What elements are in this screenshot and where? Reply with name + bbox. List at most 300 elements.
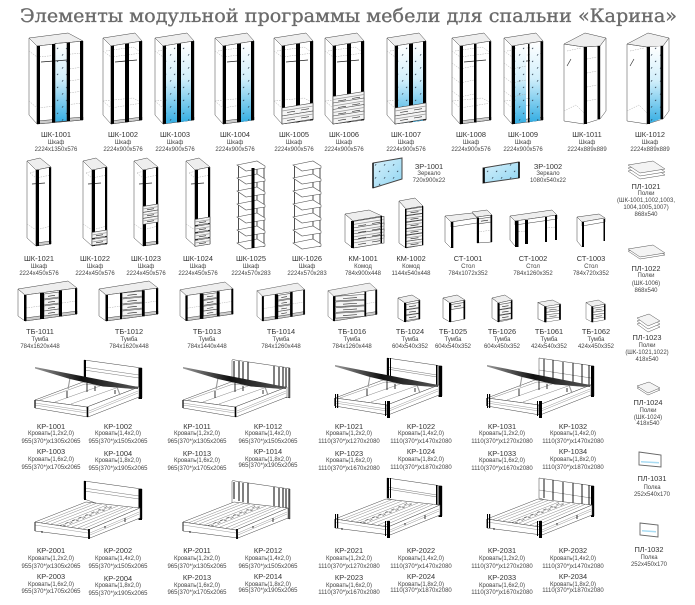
- caption: [155, 130, 195, 153]
- icon: desk with two pedestals: [510, 210, 557, 247]
- wardrobe ШК-1001: [29, 33, 83, 153]
- caption: Шкаф: [515, 140, 531, 146]
- nightstand ТБ-1025: [435, 295, 472, 350]
- caption: 784x1260x352: [513, 271, 553, 277]
- caption: 2224x889x889: [567, 147, 607, 153]
- captions: 1110(370*)x1270x2080: [318, 564, 380, 570]
- caption: ПЛ-1022: [631, 264, 661, 273]
- captions: Кровать(1,6x2,0): [28, 582, 74, 588]
- icon: lift bed, panel headboard: [487, 358, 594, 418]
- captions: 1110(370*)x1470x2080: [390, 564, 452, 570]
- captions: 1110(370*)x1870x2080: [390, 588, 452, 594]
- captions: КР-1011: [183, 422, 211, 431]
- caption: ПЛ-1031: [637, 474, 667, 483]
- caption: ТБ-1062: [582, 327, 610, 336]
- captions: Кровать(1,2x2,0): [479, 431, 525, 437]
- captions: КР-1004: [104, 449, 132, 458]
- captions: Кровать(1,2x2,0): [174, 431, 220, 437]
- captions: Кровать(1,8x2,0): [95, 583, 141, 589]
- icon: shelving: [293, 161, 321, 249]
- caption: [287, 254, 327, 277]
- captions: [471, 546, 604, 596]
- caption: [413, 162, 446, 184]
- captions: КР-1024: [407, 447, 435, 456]
- bed group КР-2031…2034: [471, 478, 604, 596]
- caption: КМ-1002: [396, 254, 426, 263]
- captions: [471, 422, 604, 472]
- caption: Стол: [584, 264, 598, 270]
- caption: [435, 327, 472, 350]
- icon: wardrobe with four drawers: [325, 33, 364, 124]
- icon: chest of drawers: [345, 210, 384, 248]
- captions: КР-2003: [37, 572, 65, 581]
- captions: КР-1014: [254, 447, 282, 456]
- sideboard ТБ-1014: [257, 283, 305, 350]
- captions: 955(370*)x1505x2065: [88, 439, 148, 445]
- captions: 1110(370*)x1270x2080: [318, 439, 380, 445]
- caption: 2224x450x576: [19, 271, 59, 277]
- caption: СТ-1002: [519, 254, 547, 263]
- wardrobe ШК-1012: [627, 33, 670, 153]
- captions: 1110(370*)x1470x2080: [542, 439, 604, 445]
- caption: ЗР-1002: [534, 162, 562, 171]
- captions: [167, 422, 298, 472]
- shelves ПЛ-1024: [633, 382, 663, 427]
- caption: Тумба: [273, 337, 290, 343]
- captions: [318, 546, 452, 596]
- bed group КР-2021…2024: [318, 478, 452, 596]
- captions: 955(370*)x1905x2065: [88, 591, 148, 597]
- icon: wardrobe with one mirror: [215, 33, 254, 124]
- icon: sideboard: [99, 281, 158, 321]
- captions: КР-2034: [559, 572, 587, 581]
- caption: 2224x900x576: [215, 147, 255, 153]
- captions: Кровать(1,8x2,0): [245, 582, 291, 588]
- caption: 418x540: [635, 357, 659, 363]
- caption: [19, 254, 59, 277]
- shelf ПЛ-1032: [631, 523, 668, 568]
- caption: 868x540: [634, 288, 658, 294]
- captions: Кровать(1,2x2,0): [479, 556, 525, 562]
- caption: ШК-1024: [183, 254, 213, 263]
- caption: Шкаф: [167, 140, 183, 146]
- captions: 1110(370*)x1870x2080: [542, 588, 604, 594]
- bed group КР-1031…1034: [471, 358, 604, 472]
- caption: [126, 254, 166, 277]
- captions: 1110(370*)x1870x2080: [542, 465, 604, 471]
- caption: ШК-1012: [635, 130, 665, 139]
- caption: Тумба: [199, 337, 216, 343]
- caption: 2224x570x283: [231, 271, 271, 277]
- captions: КР-2011: [183, 546, 211, 555]
- captions: КР-2032: [559, 546, 587, 555]
- desk СТ-1002: [510, 210, 557, 277]
- bed group КР-1001…1004: [21, 360, 148, 472]
- caption: 784x1260x448: [261, 344, 301, 350]
- caption: 2224x900x576: [451, 147, 491, 153]
- caption: (ШК-1001,1002,1003,: [617, 198, 675, 204]
- wardrobe ШК-1008: [451, 33, 491, 153]
- captions: КР-1032: [559, 422, 587, 431]
- wardrobe ШК-1026: [287, 161, 327, 277]
- caption: [531, 327, 568, 350]
- wardrobe ШК-1006: [324, 33, 364, 153]
- wardrobe ШК-1003: [155, 33, 195, 153]
- caption: (ШК-1021,1022): [625, 350, 669, 356]
- caption: [215, 130, 255, 153]
- icon: nightstand: [398, 295, 420, 322]
- captions: КР-1033: [488, 449, 516, 458]
- caption: ШК-1021: [24, 254, 54, 263]
- icon: slatted bed, plain headboard: [35, 481, 142, 539]
- mirror ЗР-1002: [483, 162, 567, 184]
- caption: ШК-1007: [391, 130, 421, 139]
- captions: 1110(370*)x1270x2080: [471, 439, 533, 445]
- sideboard ТБ-1011: [18, 281, 77, 350]
- caption: Тумба: [121, 337, 138, 343]
- captions: 965(370*)x1305x2065: [167, 564, 227, 570]
- icon: shelf stack: [637, 314, 660, 332]
- captions: 1110(370*)x1670x2080: [471, 466, 533, 472]
- caption: Шкаф: [190, 264, 206, 270]
- caption: [634, 474, 671, 498]
- caption: Комод: [354, 264, 372, 270]
- caption: 720x900x22: [413, 178, 446, 184]
- caption: ШК-1026: [292, 254, 322, 263]
- caption: Шкаф: [115, 140, 131, 146]
- shelf ПЛ-1031: [634, 452, 671, 498]
- icon: sideboard: [18, 281, 77, 321]
- caption: ПЛ-1021: [631, 182, 661, 191]
- icon: wardrobe with two drawers: [274, 33, 313, 124]
- captions: 1110(370*)x1670x2080: [471, 590, 533, 596]
- caption: Шкаф: [87, 264, 103, 270]
- icon: sideboard: [180, 282, 233, 321]
- caption: Шкаф: [243, 264, 259, 270]
- captions: Кровать(1,6x2,0): [479, 458, 525, 464]
- caption: Тумба: [541, 337, 558, 343]
- caption: [392, 327, 429, 350]
- caption: 784x1620x448: [20, 344, 60, 350]
- caption: 2224x900x576: [155, 147, 195, 153]
- captions: 955(370*)x1305x2065: [21, 564, 81, 570]
- caption: ПЛ-1032: [634, 545, 664, 554]
- caption: ЗР-1001: [415, 162, 443, 171]
- caption: [573, 254, 610, 277]
- caption: [274, 130, 314, 153]
- icon: open wardrobe with mirrors: [504, 33, 543, 124]
- shelves ПЛ-1022: [628, 245, 665, 294]
- captions: 1110(370*)x1270x2080: [471, 564, 533, 570]
- caption: Полки: [638, 343, 656, 349]
- captions: КР-1022: [407, 422, 435, 431]
- captions: КР-2014: [254, 572, 282, 581]
- chest КМ-1001: [345, 210, 384, 277]
- title: Элементы модульной программы мебели для спальни «Карина»: [20, 5, 677, 27]
- captions: КР-2004: [104, 574, 132, 583]
- icon: narrow wardrobe with four drawers: [186, 158, 210, 246]
- captions: 965(370*)x1505x2065: [238, 564, 298, 570]
- captions: Кровать(1,6x2,0): [28, 457, 74, 463]
- captions: Кровать(1,6x2,0): [174, 583, 220, 589]
- captions: Кровать(1,2x2,0): [28, 431, 74, 437]
- captions: КР-1012: [254, 422, 282, 431]
- caption: ТБ-1061: [535, 327, 563, 336]
- caption: Шкаф: [286, 140, 302, 146]
- icon: shelf stack: [628, 161, 665, 179]
- caption: 2224x900x576: [324, 147, 364, 153]
- captions: 965(370*)x1905x2065: [238, 463, 298, 469]
- caption: 252x540x170: [634, 492, 671, 498]
- captions: Кровать(1,2x2,0): [326, 431, 372, 437]
- caption: 2224x900x576: [103, 147, 143, 153]
- shelves ПЛ-1023: [625, 314, 669, 363]
- icon: mirror: [483, 162, 519, 183]
- icon: wardrobe with mirrors and drawers: [387, 33, 426, 124]
- caption: Шкаф: [138, 264, 154, 270]
- caption: Тумба: [588, 337, 605, 343]
- caption: Шкаф: [579, 140, 595, 146]
- caption: 418x540: [636, 421, 660, 427]
- captions: Кровать(1,8x2,0): [398, 582, 444, 588]
- caption: Шкаф: [227, 140, 243, 146]
- caption: 604x450x352: [484, 344, 521, 350]
- icon: slatted bed, striped headboard: [183, 480, 290, 539]
- caption: Тумба: [32, 337, 49, 343]
- caption: 1080x540x22: [530, 178, 567, 184]
- captions: 965(370*)x1905x2065: [238, 588, 298, 594]
- captions: Кровать(1,8x2,0): [550, 457, 596, 463]
- caption: 2224x900x576: [386, 147, 426, 153]
- caption: ШК-1005: [279, 130, 309, 139]
- caption: [75, 254, 115, 277]
- icon: narrow wardrobe with middle drawers: [134, 158, 158, 246]
- captions: 955(370*)x1705x2065: [21, 465, 81, 471]
- caption: Тумба: [402, 337, 419, 343]
- bed group КР-2011…2014: [167, 480, 298, 596]
- sideboard ТБ-1012: [99, 281, 158, 350]
- wardrobe ШК-1023: [126, 158, 166, 277]
- caption: [35, 130, 78, 153]
- caption: ШК-1022: [80, 254, 110, 263]
- icon: shelving with door: [237, 161, 265, 249]
- captions: КР-1002: [104, 422, 132, 431]
- captions: 965(370*)x1305x2065: [167, 439, 227, 445]
- desk СТ-1001: [445, 210, 492, 277]
- icon: slatted bed, panel headboard: [487, 478, 594, 538]
- captions: КР-2001: [37, 546, 65, 555]
- caption: ПЛ-1024: [633, 398, 663, 407]
- icon: nightstand: [492, 295, 512, 322]
- captions: Кровать(1,6x2,0): [326, 458, 372, 464]
- icon: small desk: [577, 214, 605, 247]
- caption: Комод: [402, 264, 420, 270]
- caption: ТБ-1024: [396, 327, 424, 336]
- captions: Кровать(1,4x2,0): [95, 556, 141, 562]
- caption: 784x1440x448: [187, 344, 227, 350]
- captions: Кровать(1,2x2,0): [326, 556, 372, 562]
- icon: narrow wardrobe: [27, 158, 51, 246]
- icon: nightstand: [443, 295, 465, 322]
- captions: Кровать(1,8x2,0): [245, 457, 291, 463]
- captions: КР-2023: [335, 573, 363, 582]
- caption: [332, 327, 372, 350]
- captions: 1110(370*)x1470x2080: [390, 439, 452, 445]
- captions: Кровать(1,6x2,0): [174, 458, 220, 464]
- caption: ШК-1025: [236, 254, 266, 263]
- captions: Кровать(1,8x2,0): [550, 582, 596, 588]
- caption: [178, 254, 218, 277]
- icon: low nightstand: [538, 300, 561, 322]
- captions: [21, 546, 148, 597]
- captions: 955(370*)x1505x2065: [88, 564, 148, 570]
- captions: КР-2022: [407, 546, 435, 555]
- caption: ТБ-1011: [26, 327, 54, 336]
- icon: sideboard: [257, 283, 305, 321]
- wardrobe ШК-1024: [178, 158, 218, 277]
- caption: КМ-1001: [348, 254, 378, 263]
- caption: Полка: [640, 555, 658, 561]
- caption: 2224x900x576: [274, 147, 314, 153]
- bed group КР-1011…1014: [167, 360, 298, 472]
- caption: ШК-1009: [508, 130, 538, 139]
- captions: КР-2024: [407, 572, 435, 581]
- icon: sideboard: [328, 283, 377, 321]
- caption: [578, 327, 615, 350]
- icon: tall chest of drawers: [399, 198, 423, 248]
- caption: Стол: [526, 264, 540, 270]
- wardrobe ШК-1025: [231, 161, 271, 277]
- caption: 784x900x448: [345, 271, 382, 277]
- captions: КР-2033: [488, 573, 516, 582]
- captions: 1110(370*)x1670x2080: [318, 590, 380, 596]
- captions: КР-2031: [488, 546, 516, 555]
- nightstand ТБ-1062: [578, 300, 615, 350]
- bed group КР-2001…2004: [21, 481, 148, 597]
- caption: 784x1072x352: [448, 271, 488, 277]
- icon: mirror: [373, 158, 402, 188]
- caption: ШК-1023: [131, 254, 161, 263]
- wardrobe ШК-1022: [75, 158, 115, 277]
- sideboard ТБ-1016: [328, 283, 377, 350]
- caption: 2224x450x576: [178, 271, 218, 277]
- icon: shelf: [639, 452, 661, 467]
- captions: 965(370*)x1505x2065: [238, 439, 298, 445]
- captions: Кровать(1,8x2,0): [95, 458, 141, 464]
- caption: 2224x889x889: [630, 147, 670, 153]
- icon: wardrobe: [103, 33, 142, 124]
- captions: [167, 546, 298, 596]
- caption: ТБ-1013: [193, 327, 221, 336]
- icon: lift bed, post headboard: [335, 358, 442, 418]
- captions: 1110(370*)x1470x2080: [542, 564, 604, 570]
- caption: ШК-1008: [456, 130, 486, 139]
- captions: 955(370*)x1305x2065: [21, 439, 81, 445]
- caption: ПЛ-1023: [632, 333, 662, 342]
- caption: 784x1620x448: [109, 344, 149, 350]
- captions: Кровать(1,6x2,0): [479, 583, 525, 589]
- wardrobe ШК-1005: [274, 33, 314, 153]
- caption: Полки: [640, 408, 656, 414]
- caption: [625, 333, 669, 363]
- caption: Полки: [638, 273, 654, 279]
- caption: [617, 182, 675, 218]
- caption: Стол: [461, 264, 475, 270]
- icon: slatted bed, post headboard: [335, 478, 442, 538]
- captions: Кровать(1,4x2,0): [550, 556, 596, 562]
- caption: [631, 545, 668, 568]
- shelves ПЛ-1021: [617, 161, 675, 218]
- caption: [567, 130, 607, 153]
- nightstand ТБ-1024: [392, 295, 429, 350]
- captions: Кровать(1,4x2,0): [245, 556, 291, 562]
- icon: shelf: [640, 523, 658, 537]
- captions: 1110(370*)x1870x2080: [390, 465, 452, 471]
- caption: [484, 327, 521, 350]
- caption: Шкаф: [398, 140, 414, 146]
- captions: КР-2002: [104, 546, 132, 555]
- caption: [630, 130, 670, 153]
- caption: ТБ-1016: [338, 327, 366, 336]
- captions: КР-1003: [37, 447, 65, 456]
- captions: Кровать(1,4x2,0): [398, 431, 444, 437]
- caption: 2224x450x576: [75, 271, 115, 277]
- caption: [231, 254, 271, 277]
- caption: [261, 327, 301, 350]
- wardrobe ШК-1007: [386, 33, 426, 153]
- caption: Шкаф: [642, 140, 658, 146]
- caption: Зеркало: [417, 171, 441, 177]
- captions: Кровать(1,6x2,0): [326, 583, 372, 589]
- caption: [631, 264, 661, 294]
- caption: 1004,1005,1007): [623, 205, 669, 211]
- captions: КР-1031: [488, 422, 516, 431]
- icon: narrow wardrobe with drawers: [83, 158, 107, 246]
- caption: [187, 327, 227, 350]
- captions: Кровать(1,4x2,0): [95, 431, 141, 437]
- chest КМ-1002: [392, 198, 431, 277]
- caption: [530, 162, 567, 184]
- caption: [386, 130, 426, 153]
- captions: Кровать(1,4x2,0): [245, 431, 291, 437]
- caption: [503, 130, 543, 153]
- caption: ШК-1003: [160, 130, 190, 139]
- caption: [392, 254, 431, 277]
- icon: lift bed, striped headboard: [183, 360, 290, 417]
- captions: КР-1023: [335, 449, 363, 458]
- wardrobe ШК-1011: [564, 33, 607, 153]
- mirror ЗР-1001: [373, 158, 446, 188]
- caption: Шкаф: [48, 140, 64, 146]
- caption: 784x1260x448: [332, 344, 372, 350]
- captions: [21, 422, 148, 472]
- captions: 965(370*)x1705x2065: [167, 466, 227, 472]
- desk СТ-1003: [573, 214, 610, 277]
- captions: 1110(370*)x1670x2080: [318, 466, 380, 472]
- caption: 604x540x352: [392, 344, 429, 350]
- caption: ТБ-1025: [439, 327, 467, 336]
- captions: КР-2013: [183, 573, 211, 582]
- caption: ТБ-1014: [267, 327, 295, 336]
- caption: Зеркало: [536, 171, 560, 177]
- caption: ШК-1011: [572, 130, 602, 139]
- caption: [513, 254, 553, 277]
- icon: shelf stack: [628, 245, 665, 259]
- caption: 868x540: [634, 212, 658, 218]
- captions: 955(370*)x1905x2065: [88, 466, 148, 472]
- caption: СТ-1003: [577, 254, 605, 263]
- caption: (ШК-1006): [632, 281, 660, 287]
